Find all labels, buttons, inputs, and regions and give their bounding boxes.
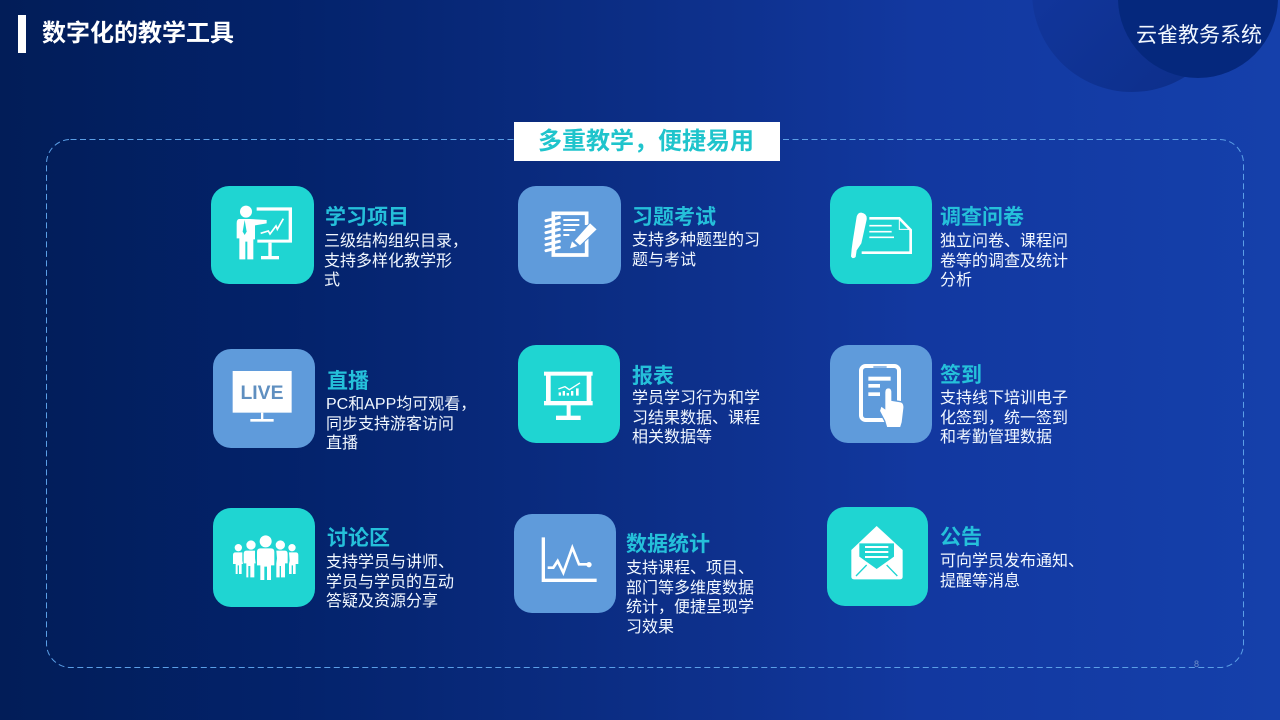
text block: 支持课程、项目、 — [626, 560, 754, 577]
icon: group of people — [213, 508, 315, 607]
title accent bar — [18, 15, 26, 53]
title: 数字化的教学工具 — [42, 20, 234, 47]
text block — [632, 389, 760, 446]
heading: 报表 — [632, 365, 674, 388]
text block: PC和APP均可观看， — [326, 396, 476, 413]
text block — [324, 232, 468, 289]
text block — [940, 552, 1084, 590]
text block: 卷等的调查及统计 — [940, 252, 1068, 270]
text block: 答疑及资源分享 — [326, 593, 438, 610]
icon: presentation chart — [518, 345, 620, 443]
icon: phone and hand — [830, 345, 932, 443]
text block: 可向学员发布通知、 — [940, 553, 1084, 570]
text block: 题与考试 — [632, 252, 696, 268]
text block: 支持线下培训电子 — [940, 390, 1068, 407]
panel: 学习项目 — [211, 186, 468, 289]
icon: notebook and pen — [518, 186, 621, 284]
text block: 三级结构组织目录， — [324, 233, 468, 250]
text block: 分析 — [940, 272, 972, 289]
heading: 习题考试 — [632, 206, 716, 229]
heading: 数据统计 — [626, 533, 710, 556]
panel heading: 多重教学，便捷易用 — [538, 128, 754, 155]
panel: 讨论区 — [213, 508, 454, 610]
text block: 式 — [324, 272, 340, 289]
panel: 签到 — [830, 345, 1068, 446]
text block — [326, 395, 476, 452]
text block: 同步支持游客访问 — [326, 416, 454, 432]
text block: 支持多样化教学形 — [324, 252, 452, 270]
text block — [632, 231, 760, 268]
heading: 讨论区 — [327, 527, 390, 550]
page number: 8 — [1194, 659, 1199, 669]
icon: live screen: LIVE — [241, 383, 284, 404]
heading: 学习项目 — [325, 206, 409, 229]
text block: 直播 — [326, 435, 358, 452]
panel: 数据统计 — [514, 514, 754, 636]
text block: 习结果数据、课程 — [632, 410, 760, 426]
brand name: 云雀教务系统 — [1136, 24, 1262, 47]
text block: 习效果 — [626, 618, 674, 636]
text block — [626, 559, 754, 636]
panel: 调查问卷 — [830, 186, 1068, 289]
icon: open envelope — [827, 507, 928, 606]
text block: 相关数据等 — [632, 429, 712, 446]
text block: 学员学习行为和学 — [632, 390, 760, 407]
heading: 公告 — [940, 526, 982, 549]
panel: 直播 — [213, 349, 476, 452]
decorative circles top right — [1032, 0, 1278, 92]
text block — [940, 232, 1068, 289]
text block: 化签到，统一签到 — [940, 410, 1068, 426]
text block — [940, 389, 1068, 446]
heading: 调查问卷 — [940, 206, 1024, 229]
heading: 签到 — [940, 364, 982, 387]
text block: 提醒等消息 — [940, 572, 1020, 590]
icon: live screen — [213, 349, 315, 448]
panel: 公告 — [827, 507, 1084, 606]
text block: 统计，便捷呈现学 — [626, 599, 754, 616]
text block: 学员与学员的互动 — [326, 574, 454, 590]
panel heading — [514, 122, 780, 161]
heading: 直播 — [327, 370, 369, 393]
text block: 部门等多维度数据 — [626, 580, 754, 596]
icon: line chart — [514, 514, 616, 613]
text block: 支持学员与讲师、 — [326, 554, 454, 571]
text block: 和考勤管理数据 — [940, 429, 1052, 446]
text block — [326, 553, 454, 610]
panel: 习题考试 — [518, 186, 760, 284]
text block: 独立问卷、课程问 — [940, 233, 1068, 250]
panel: dashed frame — [46, 139, 1244, 668]
icon: presenter with board — [211, 186, 314, 284]
icon: pen and paper — [830, 186, 932, 284]
panel: 报表 — [518, 345, 760, 446]
text block: 支持多种题型的习 — [632, 232, 760, 249]
